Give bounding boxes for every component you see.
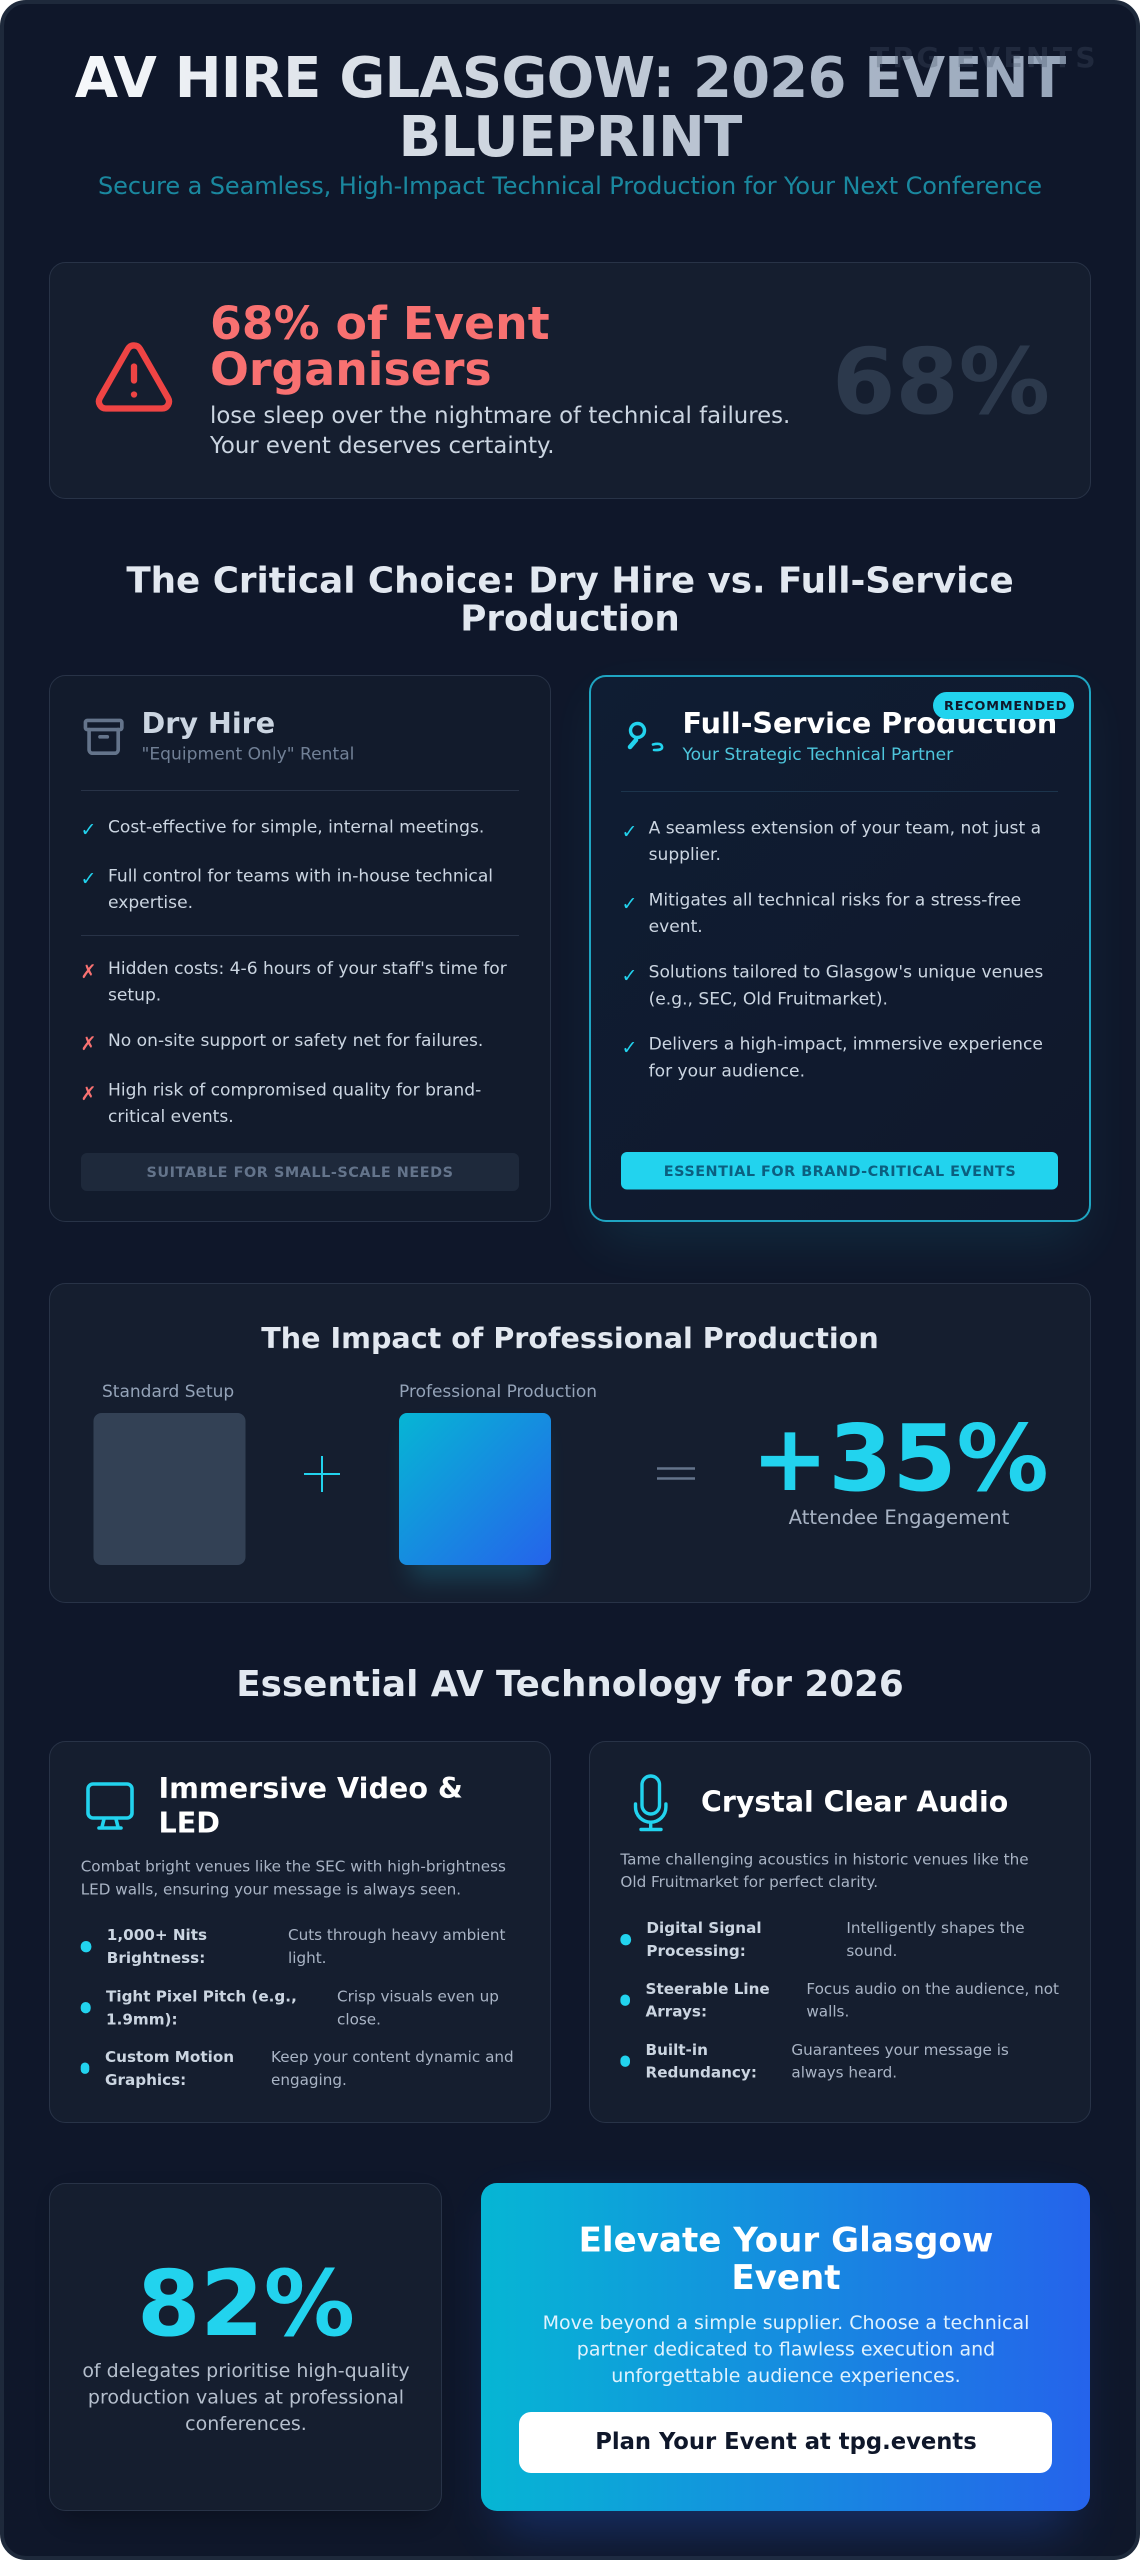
- video feature list: Crisp visuals even up: [337, 1988, 499, 2006]
- audio feature list: walls.: [806, 2003, 849, 2021]
- video heading: [158, 1771, 463, 1840]
- benefits list: Delivers a high-impact, immersive experience: [649, 1034, 1043, 1054]
- panel: immersive video and led: [50, 1742, 550, 2122]
- stat caption: of delegates prioritise high-quality: [82, 2360, 410, 2382]
- heading: the critical choice: Production: [460, 598, 680, 640]
- professional production block: Professional Production: [399, 1382, 597, 1402]
- full-service heading: [682, 706, 1057, 765]
- cta button: Plan Your Event at tpg.events: [595, 2429, 977, 2455]
- cons list: High risk of compromised quality for brand-: [108, 1080, 481, 1100]
- benefits list: supplier.: [649, 845, 721, 865]
- video description: [81, 1858, 506, 1898]
- cons list: Hidden costs: 4-6 hours of your staff's time for: [108, 959, 508, 979]
- video heading: Immersive Video &: [158, 1771, 463, 1805]
- video feature list: light.: [288, 1949, 326, 1967]
- audio feature list: Focus audio on the audience, not: [806, 1980, 1059, 1998]
- title: AV HIRE GLASGOW: 2026 EVENT: [75, 46, 1066, 111]
- full-service heading: Full-Service Production: [682, 706, 1057, 740]
- cta text: partner dedicated to flawless execution and: [577, 2339, 995, 2361]
- audio feature list: Steerable Line: [646, 1980, 770, 1998]
- plus sign: [304, 1456, 340, 1492]
- video feature list: Brightness:: [107, 1949, 205, 1967]
- video feature list: close.: [337, 2010, 381, 2028]
- audio description: Old Fruitmarket for perfect clarity.: [620, 1873, 878, 1891]
- benefits list: ✓: [622, 893, 637, 915]
- pros list: ✓: [80, 868, 96, 890]
- watermark: TPG EVENTS: TPG EVENTS: [870, 41, 1099, 74]
- audio feature list: Intelligently shapes the: [846, 1919, 1025, 1937]
- cta heading: [579, 2221, 993, 2298]
- video feature list: Graphics:: [105, 2071, 186, 2089]
- cta button: [519, 2412, 1052, 2473]
- engagement result: +35%: [751, 1405, 1049, 1512]
- audio feature list: Guarantees your message is: [791, 2041, 1009, 2059]
- video feature list: engaging.: [271, 2071, 347, 2089]
- hero heading: [210, 296, 550, 396]
- benefits list: event.: [649, 917, 703, 937]
- stat caption: conferences.: [185, 2413, 307, 2435]
- dry hire verdict badge: [81, 1153, 519, 1191]
- stat caption: [82, 2360, 410, 2435]
- pros list: [80, 818, 493, 913]
- title: BLUEPRINT: [399, 105, 742, 170]
- hero text: Your event deserves certainty.: [209, 433, 555, 459]
- subtitle: Secure a Seamless, High-Impact Technical Production for Your Next Conference: [98, 172, 1042, 200]
- benefits list: (e.g., SEC, Old Fruitmarket).: [649, 989, 888, 1009]
- cta text: Move beyond a simple supplier. Choose a technical: [543, 2312, 1029, 2334]
- heading: the critical choice: [126, 560, 1014, 640]
- hero text: [209, 403, 790, 459]
- video description: LED walls, ensuring your message is always seen.: [81, 1880, 461, 1898]
- engagement result: Attendee Engagement: [789, 1506, 1010, 1529]
- heading: the critical choice: The Critical Choice: Dry Hire vs. Full-Service: [126, 560, 1014, 602]
- audio heading: Crystal Clear Audio: [701, 1786, 1008, 1819]
- benefits list: for your audience.: [649, 1062, 805, 1082]
- benefits list: [622, 818, 1043, 1082]
- audio feature list: always heard.: [791, 2064, 897, 2082]
- video feature list: 1.9mm):: [106, 2010, 178, 2028]
- stat caption: production values at professional: [88, 2386, 404, 2408]
- pros list: ✓: [80, 819, 96, 841]
- icon: microphone: [636, 1776, 666, 1830]
- cons list: No on-site support or safety net for failures.: [108, 1031, 483, 1051]
- stat number: 82%: [137, 2252, 355, 2357]
- benefits list: Mitigates all technical risks for a stress-free: [649, 890, 1021, 910]
- panel: crystal clear audio: [590, 1742, 1090, 2122]
- cta text: [543, 2312, 1029, 2387]
- pros list: expertise.: [108, 893, 193, 913]
- audio description: Tame challenging acoustics in historic venues like the: [619, 1850, 1029, 1868]
- panel: full-service production: [590, 676, 1090, 1240]
- icon: search person: [630, 724, 662, 750]
- audio feature list: Redundancy:: [646, 2064, 757, 2082]
- benefits list: ✓: [622, 965, 637, 987]
- video feature list: Tight Pixel Pitch (e.g.,: [106, 1988, 297, 2006]
- cons list: [80, 959, 508, 1127]
- audio feature list: Digital Signal: [646, 1919, 762, 1937]
- benefits list: ✓: [622, 1037, 637, 1059]
- hero watermark stat: 68%: [832, 330, 1050, 435]
- standard setup block: Standard Setup: [102, 1382, 234, 1402]
- video feature list: Cuts through heavy ambient: [288, 1926, 505, 1944]
- cta text: unforgettable audience experiences.: [611, 2365, 961, 2387]
- dry hire heading: Dry Hire: [142, 706, 275, 740]
- panel: dry hire: [50, 676, 550, 1222]
- benefits list: Solutions tailored to Glasgow's unique venues: [649, 962, 1043, 982]
- video feature list: 1,000+ Nits: [107, 1926, 207, 1944]
- video feature list: [81, 1926, 514, 2089]
- panel: call to action: [481, 2183, 1090, 2530]
- icon: archive box: [85, 720, 122, 753]
- equals sign: [657, 1468, 695, 1478]
- audio feature list: sound.: [846, 1942, 897, 1960]
- video description: Combat bright venues like the SEC with high-brightness: [81, 1858, 506, 1876]
- panel: pain point hero: [50, 262, 1090, 498]
- hero heading: 68% of Event: [210, 296, 550, 350]
- professional production block: [399, 1382, 597, 1580]
- cons list: ✗: [80, 961, 96, 983]
- recommended badge: [933, 692, 1074, 719]
- audio feature list: Processing:: [646, 1942, 746, 1960]
- cons list: ✗: [80, 1033, 96, 1055]
- cons list: ✗: [80, 1083, 96, 1105]
- audio feature list: [620, 1919, 1059, 2082]
- dry hire heading: [142, 706, 354, 764]
- audio feature list: Built-in: [646, 2041, 708, 2059]
- audio description: [619, 1850, 1029, 1891]
- full-service verdict badge: ESSENTIAL FOR BRAND-CRITICAL EVENTS: [664, 1164, 1016, 1180]
- recommended badge: RECOMMENDED: [944, 699, 1067, 714]
- panel: impact of professional production: [50, 1284, 1090, 1602]
- audio feature list: Arrays:: [646, 2003, 707, 2021]
- panel: 82 percent stat: [50, 2184, 442, 2520]
- heading: essential av technology: Essential AV Technology for 2026: [236, 1664, 904, 1705]
- icon: warning triangle: [99, 345, 169, 409]
- impact heading: The Impact of Professional Production: [261, 1321, 879, 1355]
- benefits list: A seamless extension of your team, not just a: [649, 818, 1041, 838]
- standard setup block: [94, 1382, 246, 1565]
- dry hire verdict badge: SUITABLE FOR SMALL-SCALE NEEDS: [146, 1165, 454, 1181]
- video feature list: Keep your content dynamic and: [271, 2048, 514, 2066]
- pros list: Full control for teams with in-house technical: [108, 866, 493, 886]
- benefits list: ✓: [622, 821, 637, 843]
- hero heading: Organisers: [210, 342, 492, 396]
- video feature list: Custom Motion: [105, 2048, 234, 2066]
- full-service verdict badge: [621, 1152, 1058, 1190]
- cons list: setup.: [108, 986, 161, 1006]
- cta heading: Event: [731, 2258, 841, 2298]
- icon: monitor: [88, 1784, 132, 1828]
- cons list: critical events.: [108, 1107, 234, 1127]
- dry hire heading: "Equipment Only" Rental: [142, 744, 354, 764]
- video heading: LED: [158, 1806, 220, 1840]
- pros list: Cost-effective for simple, internal meetings.: [108, 818, 484, 838]
- hero text: lose sleep over the nightmare of technical failures.: [210, 403, 790, 429]
- cta heading: Elevate Your Glasgow: [579, 2221, 993, 2261]
- title: [75, 46, 1066, 170]
- full-service heading: Your Strategic Technical Partner: [682, 745, 954, 765]
